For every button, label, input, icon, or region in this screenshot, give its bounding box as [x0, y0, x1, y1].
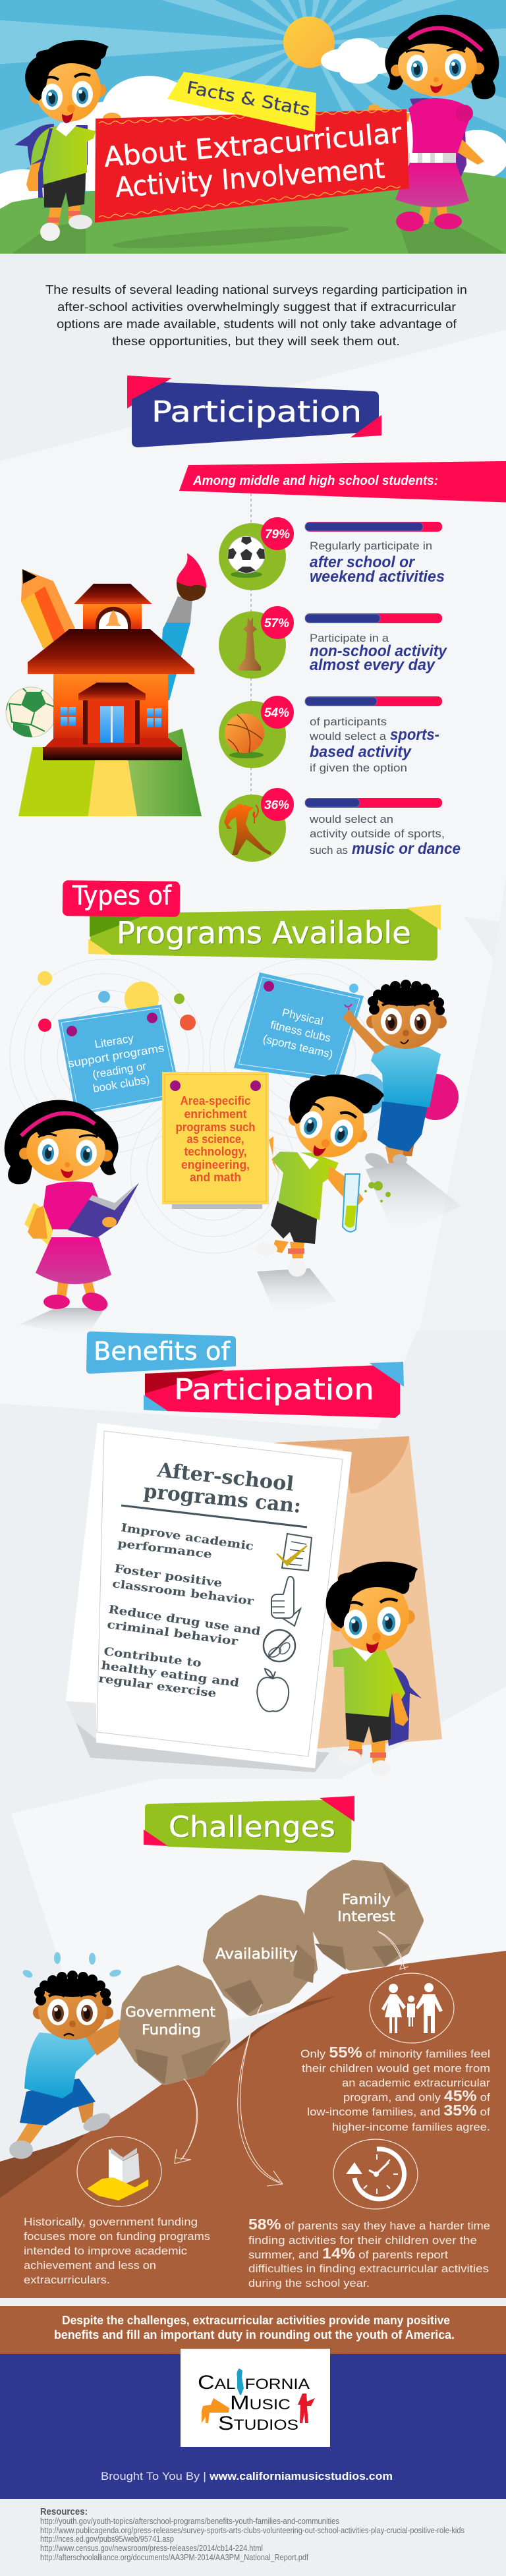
benefit list: classroom behavior — [111, 1577, 255, 1608]
icon: family — [370, 1973, 454, 2043]
yellow tag: facts and stats: Facts & Stats — [185, 78, 312, 121]
family stat text: program, and only 45% of — [343, 2087, 490, 2104]
boulder: family interest — [309, 1864, 419, 1970]
school illustration — [0, 553, 206, 816]
pencil — [21, 569, 75, 649]
paintbrush — [158, 553, 206, 700]
girl character — [368, 15, 499, 231]
stat 54 percent: based activity — [310, 743, 412, 761]
stat 79 percent — [219, 517, 445, 590]
stat 54 percent: if given the option — [310, 762, 407, 774]
benefit list: criminal behavior — [106, 1618, 239, 1648]
boy pinning the note — [343, 980, 459, 1172]
grass hill — [0, 169, 506, 254]
benefits of participation heading: Participation — [174, 1373, 374, 1407]
paper title: After-school — [155, 1459, 295, 1496]
types of programs heading — [63, 880, 441, 961]
stat 57 percent: 57% — [264, 617, 289, 630]
decorative dots — [38, 971, 386, 1113]
icon: soccer ball — [228, 536, 265, 573]
arrows from boulders — [175, 1931, 408, 2186]
icon: singer — [237, 2368, 244, 2395]
ground — [18, 729, 202, 816]
pink strip: among students: Among middle and high school students: — [192, 474, 438, 488]
footer: blue band — [0, 2354, 506, 2499]
participation heading banner: Participation — [152, 395, 362, 429]
intro paragraph: these opportunities, but they will seek them out. — [112, 334, 400, 348]
paper card: programs can: — [142, 1480, 302, 1518]
boulder: government funding: Funding — [142, 2022, 201, 2038]
stat 79 percent: weekend activities — [310, 568, 445, 586]
note: physical fitness: Physical — [281, 1006, 324, 1028]
icon: guitarist — [298, 2394, 315, 2423]
title banner: Activity Involvement — [114, 152, 386, 204]
stat 54 percent: of participants — [310, 715, 387, 728]
title text: About Extracurricular — [103, 117, 403, 173]
note: area-specific enrichment: as science, — [187, 1133, 244, 1146]
logo: California Music Studios: STUDIOS — [218, 2413, 298, 2434]
decorative concentric rings — [10, 959, 403, 1253]
availability text — [248, 2216, 490, 2289]
benefit list: Contribute to — [103, 1645, 202, 1670]
family stat text — [300, 2044, 490, 2133]
participation heading banner — [127, 376, 381, 447]
funding text: focuses more on funding programs — [24, 2230, 210, 2243]
note: area-specific enrichment: Area-specific — [181, 1094, 250, 1107]
soccer ball behind school — [5, 686, 53, 738]
challenges heading — [144, 1796, 354, 1853]
timeline dashed line — [250, 493, 252, 797]
note: literacy programs — [58, 1005, 181, 1115]
stat 54 percent — [219, 696, 442, 774]
benefits of participation heading: Benefits of — [94, 1337, 231, 1366]
family stat text: Only 55% of minority families feel — [300, 2044, 490, 2061]
logo: California Music Studios: MUSIC — [230, 2392, 291, 2414]
boulder: availability — [208, 1899, 315, 2015]
availability text: difficulties in finding extracurricular activities — [248, 2262, 489, 2275]
family stat text: an academic extracurricular — [342, 2077, 490, 2089]
challenges heading: Challenges — [169, 1810, 335, 1844]
sun — [283, 16, 335, 68]
benefit list: performance — [117, 1537, 213, 1561]
icon: basketball — [225, 714, 264, 753]
footer credit line — [101, 2470, 393, 2482]
benefit list: Improve academic — [120, 1521, 254, 1554]
resources list: http://nces.ed.gov/pubs95/web/95741.asp — [40, 2534, 174, 2544]
resources list — [40, 2506, 464, 2562]
girl with books — [5, 1100, 139, 1314]
note: area-specific enrichment: and math — [190, 1171, 241, 1184]
tower — [74, 584, 152, 631]
logo: California Music Studios: CAL FORNIA — [198, 2372, 310, 2394]
benefit list: healthy eating and — [100, 1659, 240, 1690]
icon: pianist — [202, 2398, 229, 2423]
footer: conclusion band: benefits and fill an important duty in rounding out the youth of America. — [54, 2328, 455, 2341]
benefit list — [98, 1521, 262, 1700]
yellow tag: facts and stats — [167, 72, 316, 132]
boy pushing boulders — [9, 1952, 128, 2159]
resources list: http://afterschoolalliance.org/documents/AA3PM-2014/AA3PM_National_Report.pdf — [40, 2553, 308, 2562]
icon: clock — [333, 2139, 418, 2209]
footer credit line: Brought To You By | — [101, 2470, 206, 2482]
main roof — [28, 629, 194, 674]
stat 36 percent: activity outside of sports, — [310, 827, 445, 840]
note: area-specific enrichment: engineering, — [181, 1158, 250, 1171]
icon: chess king — [239, 617, 261, 671]
stat 54 percent: sports- — [390, 726, 439, 744]
availability text: 58% of parents say they have a harder time — [248, 2216, 490, 2233]
header scene — [0, 0, 506, 254]
funding text: extracurriculars. — [24, 2274, 110, 2286]
icon: apple — [257, 1669, 289, 1712]
paper card — [66, 1423, 352, 1772]
icon: book on hand — [77, 2137, 161, 2206]
funding text: intended to improve academic — [24, 2245, 188, 2257]
windows — [61, 707, 161, 727]
stat 36 percent: 36% — [264, 798, 289, 812]
intro paragraph: The results of several leading national surveys regarding participation in — [45, 283, 467, 296]
types of programs heading: Programs Available — [117, 915, 411, 951]
availability text: summer, and 14% of parents report — [248, 2245, 448, 2262]
icon: checklist — [277, 1534, 312, 1571]
stat 57 percent: non-school activity — [310, 642, 448, 660]
benefits of participation heading — [86, 1331, 404, 1418]
availability text: during the school year. — [248, 2277, 370, 2289]
boulder: family interest: Interest — [337, 1909, 395, 1924]
boulder: family interest: Family — [342, 1891, 391, 1907]
note: area-specific enrichment: technology, — [184, 1145, 246, 1158]
resources list: http://www.census.gov/newsroom/press-releases/2014/cb14-224.html — [40, 2544, 263, 2553]
logo: California Music Studios — [181, 2349, 330, 2447]
funding text: achievement and less on — [24, 2259, 156, 2272]
note: area-specific enrichment: enrichment — [184, 1107, 246, 1121]
stat 36 percent: music or dance — [352, 840, 461, 858]
stat 79 percent: Regularly participate in — [310, 540, 432, 552]
note: physical fitness: fitness clubs — [269, 1019, 332, 1044]
cloud bank — [0, 76, 506, 219]
resources list: http://youth.gov/youth-topics/afterschool-programs/benefits-youth-families-and-communities — [40, 2517, 339, 2526]
family stat text: low-income families, and 35% of — [307, 2102, 490, 2119]
stat 57 percent: almost every day — [310, 656, 436, 674]
funding text: Historically, government funding — [24, 2216, 198, 2228]
note: literacy programs: Literacy — [94, 1032, 135, 1051]
boulder: government funding: Government — [125, 2004, 215, 2020]
stat 54 percent: 54% — [264, 706, 289, 720]
icon: dancer — [224, 804, 271, 855]
intro paragraph: options are made available, students will not only take advantage of — [57, 317, 457, 331]
footer: conclusion band — [0, 2306, 506, 2354]
note: literacy programs: (reading or — [92, 1059, 148, 1081]
note: area-specific enrichment: programs such — [175, 1121, 256, 1134]
note: physical fitness: (sports teams) — [262, 1032, 334, 1061]
footer: conclusion band: Despite the challenges, extracurricular activities provide many positive — [62, 2314, 450, 2327]
boy beside paper — [326, 1562, 422, 1776]
benefit list: regular exercise — [98, 1672, 217, 1700]
stat 36 percent — [219, 788, 461, 862]
boy with test tube — [255, 1059, 391, 1277]
types of programs heading: Types of — [72, 881, 172, 911]
icon: thumbs up — [271, 1577, 300, 1626]
family stat text: their children would get more from — [302, 2062, 490, 2075]
beige backdrop — [274, 1436, 442, 1749]
stat 79 percent: 79% — [265, 528, 290, 542]
pink strip: among students — [179, 461, 506, 502]
resources list: Resources: — [40, 2506, 88, 2517]
icon: no drugs — [264, 1630, 295, 1662]
benefit list: Reduce drug use and — [107, 1603, 262, 1638]
note: area-specific enrichment — [162, 1072, 269, 1209]
availability text: finding activities for their children over the — [248, 2234, 477, 2247]
note: literacy programs: support programs — [67, 1042, 165, 1070]
stat 57 percent: Participate in a — [310, 632, 389, 644]
boy character — [14, 40, 121, 241]
stat 57 percent — [219, 606, 448, 679]
boulder: government funding — [123, 1970, 227, 2084]
cloud: right of sun — [321, 38, 389, 84]
shadows on the floor — [20, 1160, 461, 1337]
stat 54 percent: would select a — [309, 730, 387, 742]
porch and door — [78, 683, 146, 744]
family stat text: higher-income families agree. — [332, 2121, 490, 2133]
boulder: availability: Availability — [215, 1946, 298, 1963]
stat 79 percent: after school or — [310, 553, 416, 571]
note: physical fitness — [234, 972, 364, 1082]
note: literacy programs: book clubs) — [92, 1073, 151, 1095]
intro paragraph: after-school activities overwhelmingly suggest that if extracurricular — [57, 300, 456, 314]
footer credit line: www.californiamusicstudios.com — [209, 2470, 393, 2482]
walls — [53, 674, 168, 743]
brown hill — [0, 1951, 506, 2298]
funding text — [24, 2216, 210, 2286]
sun rays — [0, 0, 506, 174]
title banner — [95, 109, 409, 223]
benefit list: Foster positive — [113, 1562, 223, 1590]
stat 36 percent: such as — [310, 844, 348, 856]
stat 36 percent: would select an — [309, 813, 393, 826]
intro paragraph — [45, 283, 467, 348]
platform — [43, 738, 182, 760]
